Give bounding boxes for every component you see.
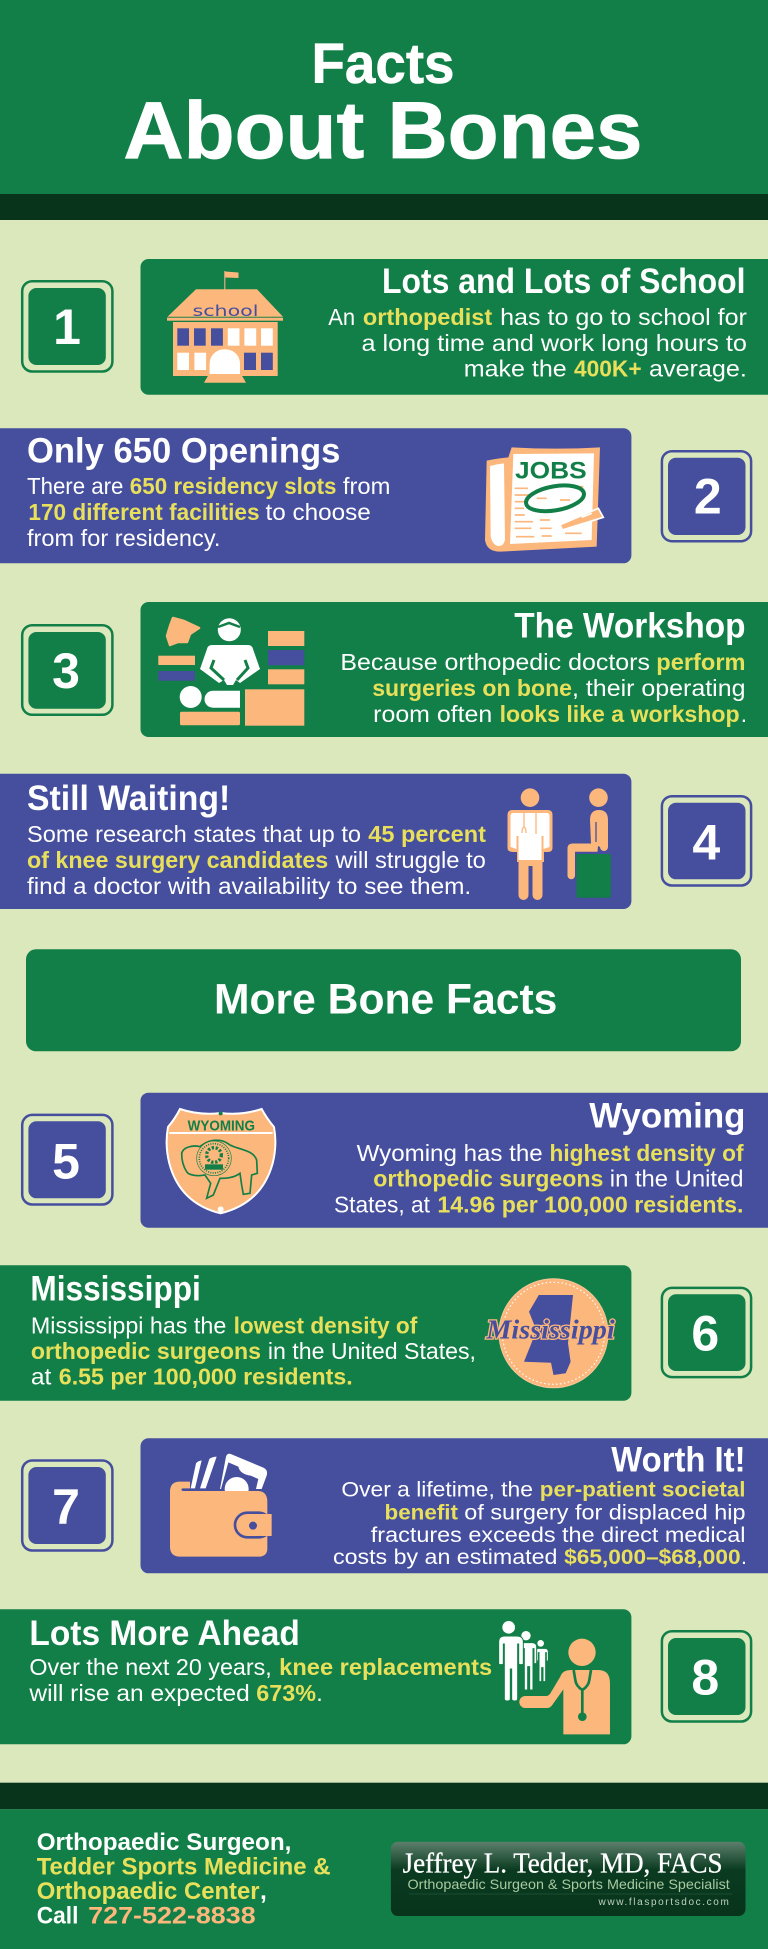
body text: , their operating	[572, 675, 746, 701]
number badge 4: 4	[692, 814, 720, 870]
heading: Only 650 Openings	[27, 432, 340, 471]
heading: Lots More Ahead	[29, 1614, 300, 1653]
heading: Wyoming	[589, 1097, 746, 1136]
body text	[333, 1478, 747, 1569]
body text: 6.55 per 100,000 residents.	[59, 1363, 353, 1389]
body text: 673%	[256, 1680, 316, 1706]
icon: surgeon operating	[158, 618, 304, 726]
body text: fractures exceeds the direct medical	[371, 1523, 746, 1547]
number badge 7: 7	[52, 1479, 80, 1535]
call to action text	[37, 1829, 331, 1929]
icon: doctor and waiting patient	[508, 788, 611, 900]
body text: Because orthopedic doctors	[340, 649, 650, 675]
icon: Wyoming highway shield: WYOMING	[188, 1118, 255, 1135]
body text	[28, 1654, 492, 1706]
body text: find a doctor with availability to see them.	[27, 873, 471, 899]
body text	[334, 1140, 744, 1217]
body text: .	[741, 1545, 747, 1569]
call to action text: Orthopaedic Surgeon,	[37, 1829, 291, 1856]
number badge 7	[22, 1460, 112, 1550]
body text: costs by an estimated	[333, 1545, 557, 1569]
number badge 3	[22, 625, 112, 715]
body text: to choose	[266, 499, 371, 525]
number badge 8	[662, 1631, 751, 1722]
body text: a long time and work long hours to	[362, 330, 747, 356]
call to action text: Call	[37, 1902, 78, 1929]
body text: orthopedic surgeons	[31, 1338, 261, 1364]
body text: from	[343, 473, 390, 499]
number badge 3: 3	[52, 643, 80, 699]
body text: in the United	[610, 1166, 744, 1192]
icon: jobs newspaper: JOBS	[515, 457, 587, 484]
body text: 45 percent	[368, 821, 486, 847]
icon: Wyoming highway shield	[167, 1109, 275, 1213]
body text: 400K+	[574, 356, 642, 382]
body text: .	[316, 1680, 323, 1706]
heading: The Workshop	[514, 606, 746, 645]
call to action text: Tedder Sports Medicine &	[37, 1853, 331, 1880]
body text: Some research states that up to	[27, 821, 361, 847]
body text: make the	[464, 356, 567, 382]
heading: Still Waiting!	[27, 779, 230, 818]
logo plate: Jeffrey L. Tedder, MD, FACS	[403, 1848, 722, 1880]
title: About Bones	[123, 86, 642, 176]
number badge 5	[22, 1115, 112, 1204]
heading: Worth It!	[611, 1441, 746, 1480]
number badge 2: 2	[694, 469, 722, 525]
number badge 1	[22, 281, 112, 372]
number badge 2	[662, 451, 751, 541]
logo plate: www.flasportsdoc.com	[598, 1897, 729, 1908]
body text: room often	[373, 701, 492, 727]
logo plate	[391, 1842, 746, 1916]
logo plate: Orthopaedic Surgeon & Sports Medicine Specialist	[408, 1876, 730, 1892]
body text	[328, 304, 747, 382]
panel: fact 3 workshop	[140, 602, 768, 737]
body text: of surgery for displaced hip	[464, 1500, 746, 1524]
body text: 170 different facilities	[28, 499, 260, 525]
body text: Wyoming has the	[357, 1140, 543, 1166]
panel: fact 6 Mississippi	[0, 1265, 631, 1401]
panel: fact 8 more ahead	[0, 1609, 631, 1744]
number badge 5: 5	[52, 1133, 80, 1189]
call to action text: Orthopaedic Center	[37, 1878, 260, 1905]
body text: An	[328, 304, 355, 330]
body text: will struggle to	[334, 847, 486, 873]
body text: Over a lifetime, the	[341, 1478, 533, 1502]
number badge 6: 6	[691, 1306, 719, 1362]
body text	[27, 821, 486, 899]
call to action text: ,	[260, 1878, 267, 1905]
body text: lowest density of	[234, 1312, 417, 1338]
body text: Over the next 20 years,	[29, 1654, 272, 1680]
panel: fact 2 openings	[0, 428, 631, 563]
body text: States, at	[334, 1191, 430, 1217]
body text: knee replacements	[279, 1654, 492, 1680]
panel: fact 5 Wyoming	[140, 1093, 768, 1228]
body text: will rise an expected	[28, 1680, 250, 1706]
panel: fact 1 school	[140, 259, 768, 395]
icon: doctor with patients	[499, 1621, 610, 1734]
icon: Mississippi badge: Mississippi	[485, 1314, 615, 1344]
icon: wallet with money	[170, 1454, 272, 1557]
section heading bar	[26, 949, 741, 1051]
icon: school building: school	[192, 302, 258, 320]
body text: 14.96 per 100,000 residents.	[437, 1191, 744, 1217]
body text: There are	[27, 473, 123, 499]
body text: orthopedic surgeons	[373, 1166, 603, 1192]
body text: average.	[649, 356, 747, 382]
heading: Mississippi	[30, 1270, 201, 1309]
number badge 8: 8	[691, 1649, 719, 1705]
body text: perform	[656, 649, 746, 675]
number badge 1: 1	[53, 299, 81, 355]
body text: highest density of	[550, 1140, 744, 1166]
title	[123, 32, 642, 176]
panel: fact 7 worth it	[140, 1438, 768, 1573]
title: Facts	[312, 32, 454, 96]
body text: per-patient societal	[540, 1478, 746, 1502]
body text: 650 residency slots	[130, 473, 336, 499]
body text: at	[31, 1363, 52, 1389]
body text: surgeries on bone	[372, 675, 572, 701]
number badge 4	[662, 796, 751, 886]
body text: $65,000–$68,000	[564, 1545, 741, 1569]
icon: Mississippi badge	[485, 1279, 615, 1388]
section heading bar: More Bone Facts	[214, 975, 557, 1023]
call to action text: 727-522-8838	[88, 1902, 256, 1929]
body text: in the United States,	[268, 1338, 476, 1364]
icon: school building	[167, 271, 283, 383]
body text: Mississippi has the	[31, 1312, 226, 1338]
body text: looks like a workshop	[500, 701, 740, 727]
body text: has to go to school for	[500, 304, 747, 330]
body text: .	[741, 701, 747, 727]
footer	[0, 1783, 768, 1949]
body text: orthopedist	[363, 304, 492, 330]
number badge 6	[662, 1288, 751, 1377]
panel: fact 4 waiting	[0, 774, 631, 909]
header banner	[0, 0, 768, 220]
body text	[27, 473, 390, 551]
body text: of knee surgery candidates	[27, 847, 328, 873]
body text: from for residency.	[27, 525, 220, 551]
body text: benefit	[384, 1500, 458, 1524]
body text	[340, 649, 747, 727]
body text	[31, 1312, 476, 1389]
icon: jobs newspaper	[485, 447, 603, 552]
